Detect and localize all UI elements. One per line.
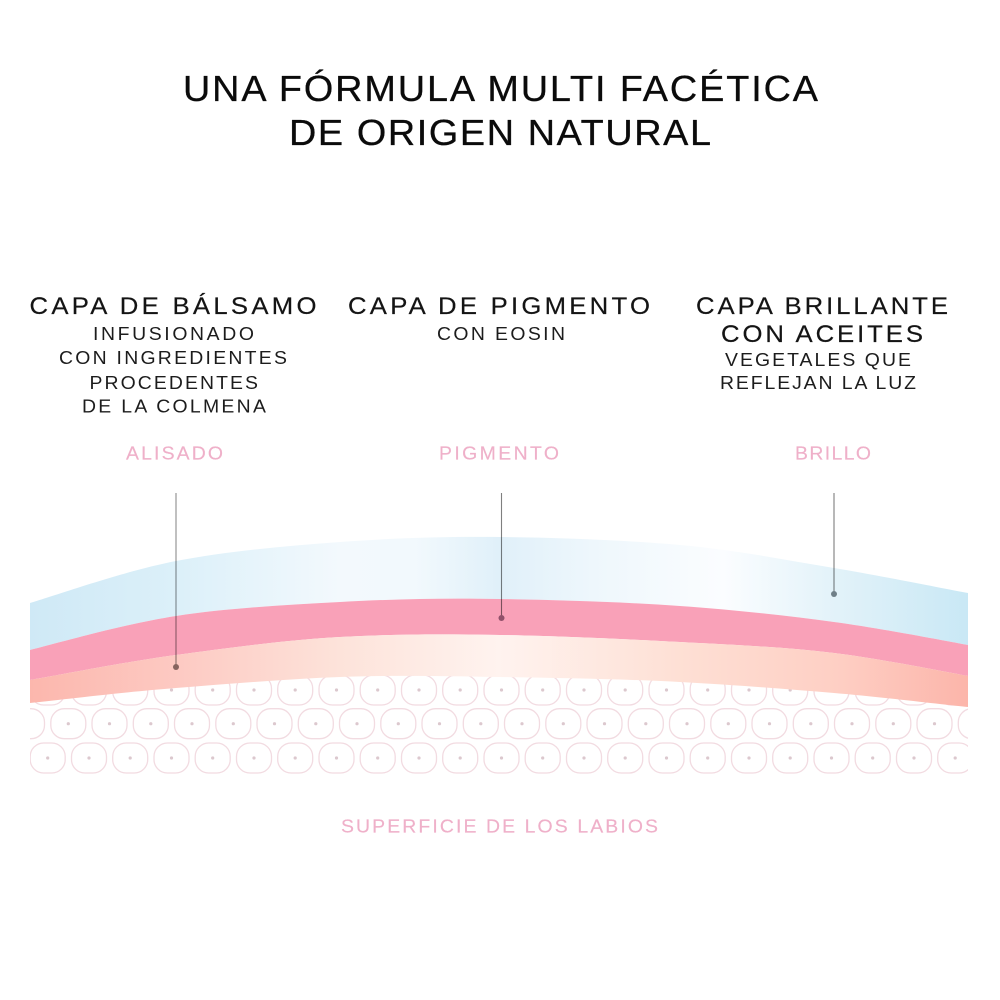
label: brillo: BRILLO	[795, 444, 871, 464]
description: capa de bálsamo	[59, 324, 287, 417]
description: capa de bálsamo: DE LA COLMENA	[82, 397, 266, 417]
heading: capa brillante: CAPA BRILLANTE	[696, 293, 948, 320]
column: capa de bálsamo	[30, 292, 316, 464]
label: pigmento: PIGMENTO	[439, 444, 559, 464]
layer: blue gloss band	[30, 537, 968, 650]
leader line: alisado	[173, 493, 179, 670]
leader line: pigmento	[498, 493, 504, 621]
description: capa de bálsamo: PROCEDENTES	[90, 373, 258, 394]
label: superficie de los labios: SUPERFICIE DE LOS LABIOS	[341, 817, 658, 837]
description: capa de pigmento: CON EOSIN	[437, 324, 565, 345]
layer: peach balm band	[30, 634, 968, 707]
title: DE ORIGEN NATURAL	[289, 113, 711, 153]
description: capa de bálsamo: INFUSIONADO	[93, 324, 254, 345]
description: capa de bálsamo: CON INGREDIENTES	[59, 348, 287, 369]
heading: capa de bálsamo: CAPA DE BÁLSAMO	[30, 292, 316, 320]
leader line: brillo	[831, 493, 837, 597]
description: capa brillante: REFLEJAN LA LUZ	[720, 373, 916, 394]
layer: pink pigment band	[30, 599, 968, 680]
heading: capa brillante: CON ACEITES	[721, 321, 923, 348]
title	[183, 69, 818, 153]
label: alisado: ALISADO	[126, 444, 223, 464]
lip surface cells	[10, 675, 993, 773]
heading: capa brillante	[696, 293, 948, 348]
heading: capa de pigmento: CAPA DE PIGMENTO	[348, 293, 650, 320]
column: capa de pigmento	[348, 293, 650, 464]
title: UNA FÓRMULA MULTI FACÉTICA	[183, 69, 818, 109]
description: capa brillante	[720, 350, 916, 394]
column: capa brillante	[696, 293, 948, 464]
description: capa brillante: VEGETALES QUE	[725, 350, 911, 371]
